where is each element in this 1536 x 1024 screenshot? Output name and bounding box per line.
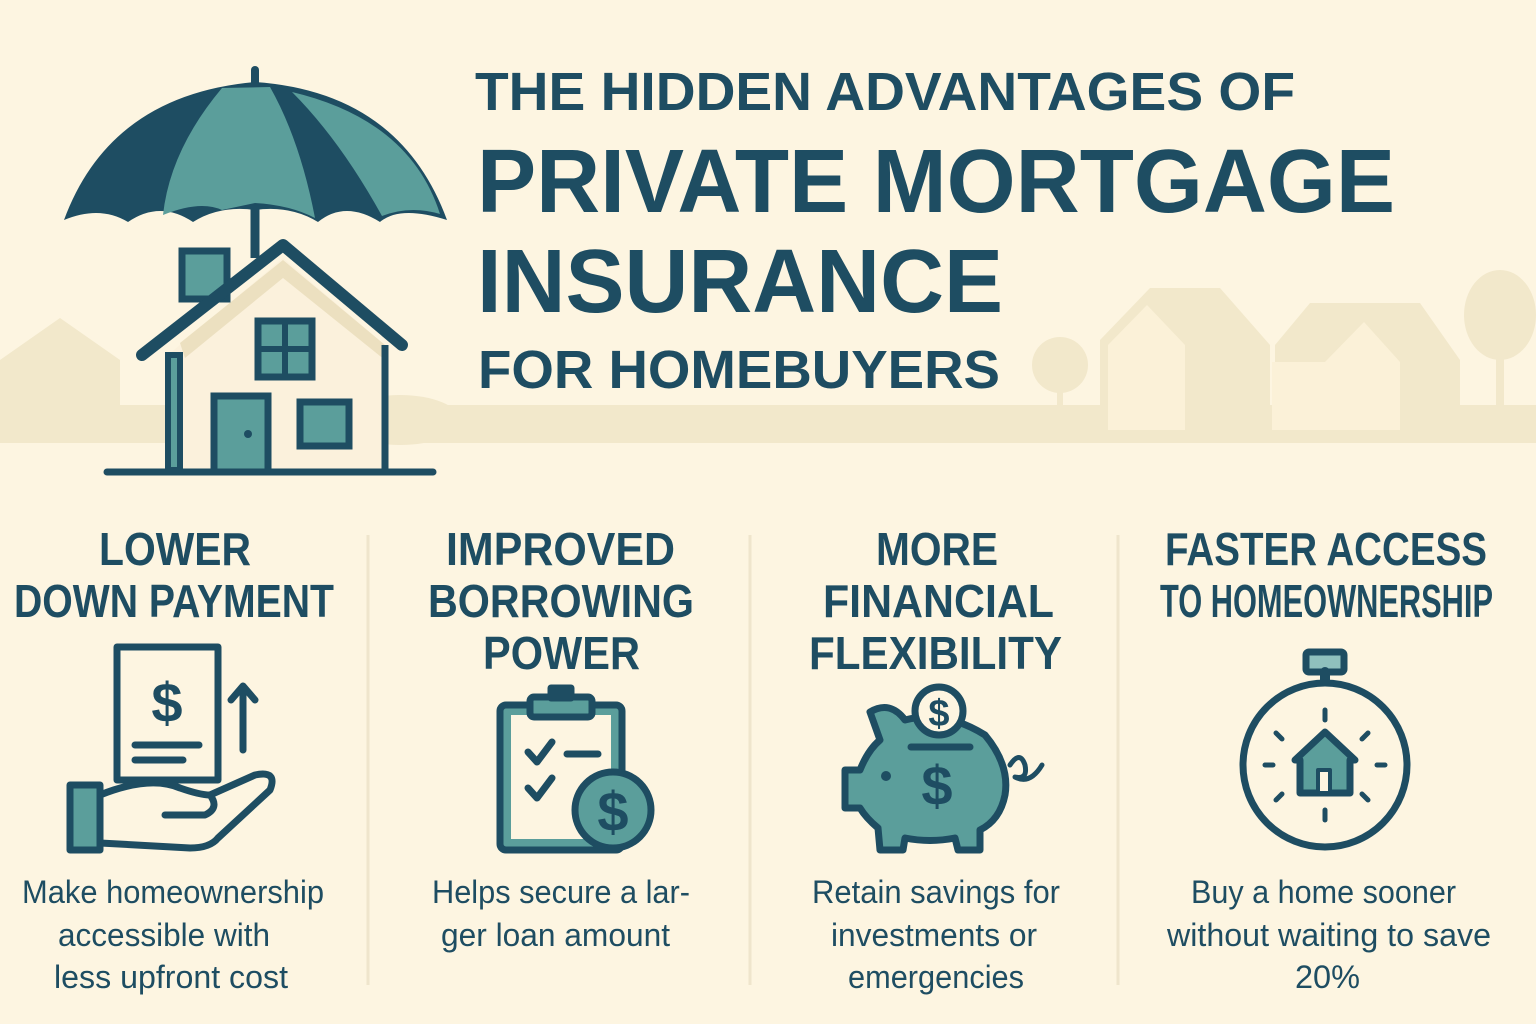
text: less upfront cost: [54, 959, 288, 995]
title: [475, 62, 1395, 400]
heading: IMPROVED: [446, 523, 675, 575]
text: Helps secure a lar-: [432, 874, 690, 910]
icon: umbrella over house: [64, 70, 447, 472]
heading: [1160, 523, 1493, 627]
text: accessible with: [58, 917, 270, 953]
heading: POWER: [483, 627, 640, 679]
text: [432, 874, 690, 953]
icon: clipboard with coin: $: [597, 780, 629, 843]
text: Make homeownership: [22, 874, 324, 910]
title: THE HIDDEN ADVANTAGES OF: [475, 62, 1295, 122]
title: PRIVATE MORTGAGE: [477, 132, 1395, 232]
panel: improved borrowing power: [428, 523, 694, 953]
heading: FINANCIAL: [823, 575, 1054, 627]
panel: faster access to homeownership: [1160, 523, 1493, 995]
text: investments or: [831, 917, 1037, 953]
icon: piggy bank: [845, 687, 1042, 850]
text: emergencies: [848, 959, 1024, 995]
text: [812, 874, 1060, 995]
text: [1166, 874, 1491, 995]
icon: clipboard with coin: [500, 688, 651, 850]
heading: BORROWING: [428, 575, 694, 627]
icon: stopwatch with house: [1243, 652, 1407, 847]
text: Buy a home sooner: [1191, 874, 1456, 910]
icon: hand with bill: [70, 647, 272, 850]
text: Retain savings for: [812, 874, 1060, 910]
panel: more financial flexibility: [809, 523, 1062, 995]
heading: LOWER: [99, 523, 251, 575]
text: [22, 874, 324, 995]
heading: [809, 523, 1062, 679]
heading: [428, 523, 694, 679]
title: FOR HOMEBUYERS: [478, 340, 1000, 400]
icon: piggy bank: $: [928, 693, 950, 735]
background: neighborhood silhouette: [0, 270, 1536, 445]
heading: MORE: [876, 523, 998, 575]
title: INSURANCE: [477, 232, 1003, 332]
text: 20%: [1295, 959, 1360, 995]
heading: [14, 523, 334, 627]
heading: DOWN PAYMENT: [14, 575, 334, 627]
text: ger loan amount: [441, 917, 670, 953]
text: without waiting to save: [1166, 917, 1491, 953]
heading: FLEXIBILITY: [809, 627, 1062, 679]
icon: piggy bank: $: [921, 754, 953, 817]
icon: hand with bill: $: [151, 671, 183, 734]
panel: lower down payment: [14, 523, 334, 995]
